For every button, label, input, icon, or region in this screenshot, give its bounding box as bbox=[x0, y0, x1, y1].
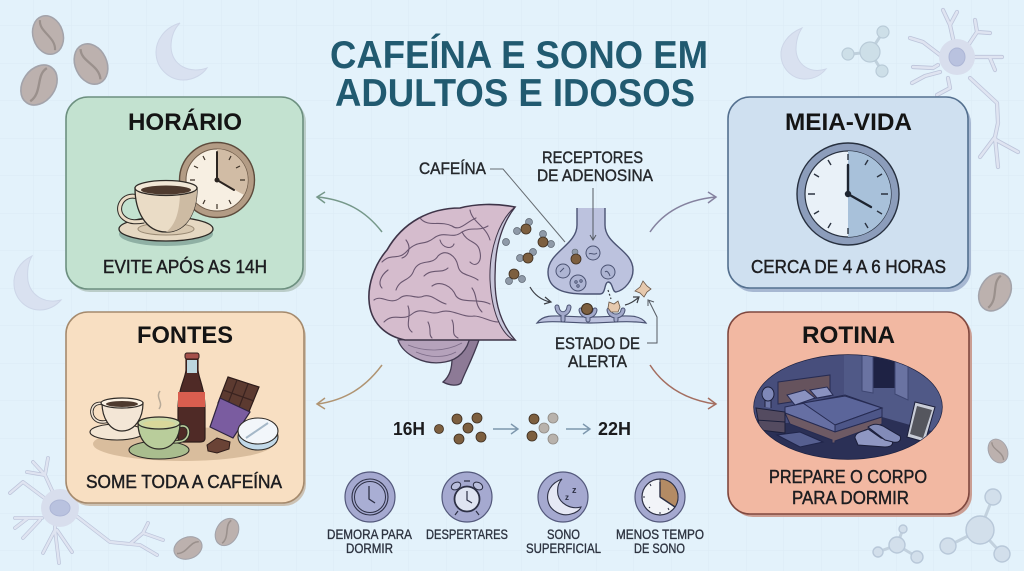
arrow: to rotina bbox=[650, 365, 716, 409]
illustration: caffeine sources bbox=[90, 353, 278, 461]
label: estado de alerta: ESTADO DE bbox=[555, 334, 640, 353]
icon: wall clock bbox=[180, 142, 254, 218]
cortex bbox=[369, 204, 515, 340]
title bbox=[330, 33, 708, 115]
icon: sono superficial: z bbox=[572, 485, 577, 495]
vesicles bbox=[556, 246, 615, 291]
illustration: synapse bbox=[530, 208, 651, 323]
text: despertares: DESPERTARES bbox=[426, 526, 508, 542]
illustration: caffeine molecules bbox=[502, 218, 554, 284]
dots fading bbox=[527, 413, 558, 444]
caption: rotina: PARA DORMIR bbox=[792, 487, 909, 508]
adenosine pieces bbox=[608, 301, 620, 312]
heading: meia-vida: MEIA-VIDA bbox=[785, 109, 912, 136]
decoration: coffee beans top left bbox=[13, 12, 114, 112]
text: menos tempo de sono bbox=[616, 526, 704, 556]
title: CAFEÍNA E SONO EM bbox=[330, 33, 708, 77]
presynaptic terminal bbox=[548, 208, 633, 294]
illustration: bedroom bbox=[754, 352, 942, 460]
decoration: moon left bbox=[14, 256, 61, 310]
decoration: moon top left bbox=[156, 23, 207, 80]
small arrows bbox=[530, 287, 639, 305]
panel: meia-vida bbox=[728, 97, 971, 292]
label: 22h: 22H bbox=[598, 419, 631, 439]
decoration: moon top right bbox=[781, 28, 826, 79]
arrow: to meia-vida bbox=[650, 192, 716, 232]
text: demora para dormir: DEMORA PARA bbox=[327, 526, 413, 542]
arrow bbox=[566, 424, 590, 434]
icon: sono superficial bbox=[538, 472, 588, 522]
arrow: to horário bbox=[317, 192, 382, 232]
decoration: beans bottom bbox=[171, 514, 244, 563]
illustration: brain bbox=[369, 204, 515, 385]
cut edge of brain bbox=[490, 207, 515, 340]
brainstem bbox=[443, 340, 479, 385]
label: 16h: 16H bbox=[393, 419, 425, 439]
decoration: neuron top right bbox=[910, 10, 1018, 167]
caption: horário: EVITE APÓS AS 14H bbox=[103, 256, 267, 277]
heading: fontes: FONTES bbox=[137, 322, 233, 349]
text: sono superficial bbox=[526, 526, 601, 556]
label: receptores de adenosina bbox=[537, 148, 654, 240]
text: demora para dormir bbox=[327, 526, 413, 556]
brain folds bbox=[374, 210, 498, 338]
icon: chocolate bar bbox=[207, 377, 259, 453]
label: cafeína: CAFEÍNA bbox=[419, 159, 487, 178]
decoration: molecules bottom right bbox=[873, 489, 1010, 563]
icon: sono superficial: z bbox=[565, 493, 569, 502]
text: sono superficial: SUPERFICIAL bbox=[526, 540, 601, 556]
heading: horário: HORÁRIO bbox=[128, 108, 242, 136]
label: cafeína bbox=[419, 159, 565, 242]
text: menos tempo de sono: DE SONO bbox=[634, 540, 685, 556]
cerebellum bbox=[398, 336, 470, 363]
label: receptores de adenosina: RECEPTORES bbox=[542, 148, 643, 167]
decoration: molecule top right bbox=[842, 26, 889, 77]
dots at 16h bbox=[434, 413, 486, 444]
label: estado de alerta: ALERTA bbox=[568, 352, 628, 371]
icon: menos tempo de sono bbox=[635, 472, 685, 522]
arrow: to fontes bbox=[317, 365, 382, 409]
decoration: beans right bbox=[972, 267, 1018, 466]
icon: cola bottle bbox=[178, 353, 205, 442]
caption: meia-vida: CERCA DE 4 A 6 HORAS bbox=[751, 256, 946, 277]
icon: clock half-life bbox=[797, 143, 899, 245]
label: receptores de adenosina: DE ADENOSINA bbox=[537, 166, 654, 185]
text: menos tempo de sono: MENOS TEMPO bbox=[616, 526, 704, 542]
decoration: neuron bottom left bbox=[10, 458, 163, 563]
icon: despertares bbox=[442, 472, 492, 522]
timeline: 16h to 22h bbox=[393, 413, 631, 444]
caption: rotina: PREPARE O CORPO bbox=[769, 466, 927, 487]
heading: rotina: ROTINA bbox=[802, 322, 895, 349]
caption: rotina bbox=[769, 466, 927, 508]
postsynaptic membrane with receptors bbox=[537, 304, 646, 323]
icon: caffeine pill bbox=[238, 418, 278, 450]
caption: fontes: SOME TODA A CAFEÍNA bbox=[86, 471, 283, 492]
label: estado de alerta bbox=[555, 300, 657, 371]
icon: coffee cup bbox=[90, 398, 144, 440]
text: demora para dormir: DORMIR bbox=[346, 540, 393, 556]
panel: rotina bbox=[728, 312, 972, 517]
icon: green tea cup bbox=[129, 391, 189, 459]
panel: fontes bbox=[66, 312, 306, 506]
icon: coffee cup bbox=[119, 180, 213, 246]
panel: horário bbox=[66, 97, 306, 292]
text: sono superficial: SONO bbox=[547, 526, 580, 542]
icon: demora para dormir bbox=[345, 472, 395, 522]
arrow bbox=[493, 424, 518, 434]
title: ADULTOS E IDOSOS bbox=[335, 72, 695, 115]
